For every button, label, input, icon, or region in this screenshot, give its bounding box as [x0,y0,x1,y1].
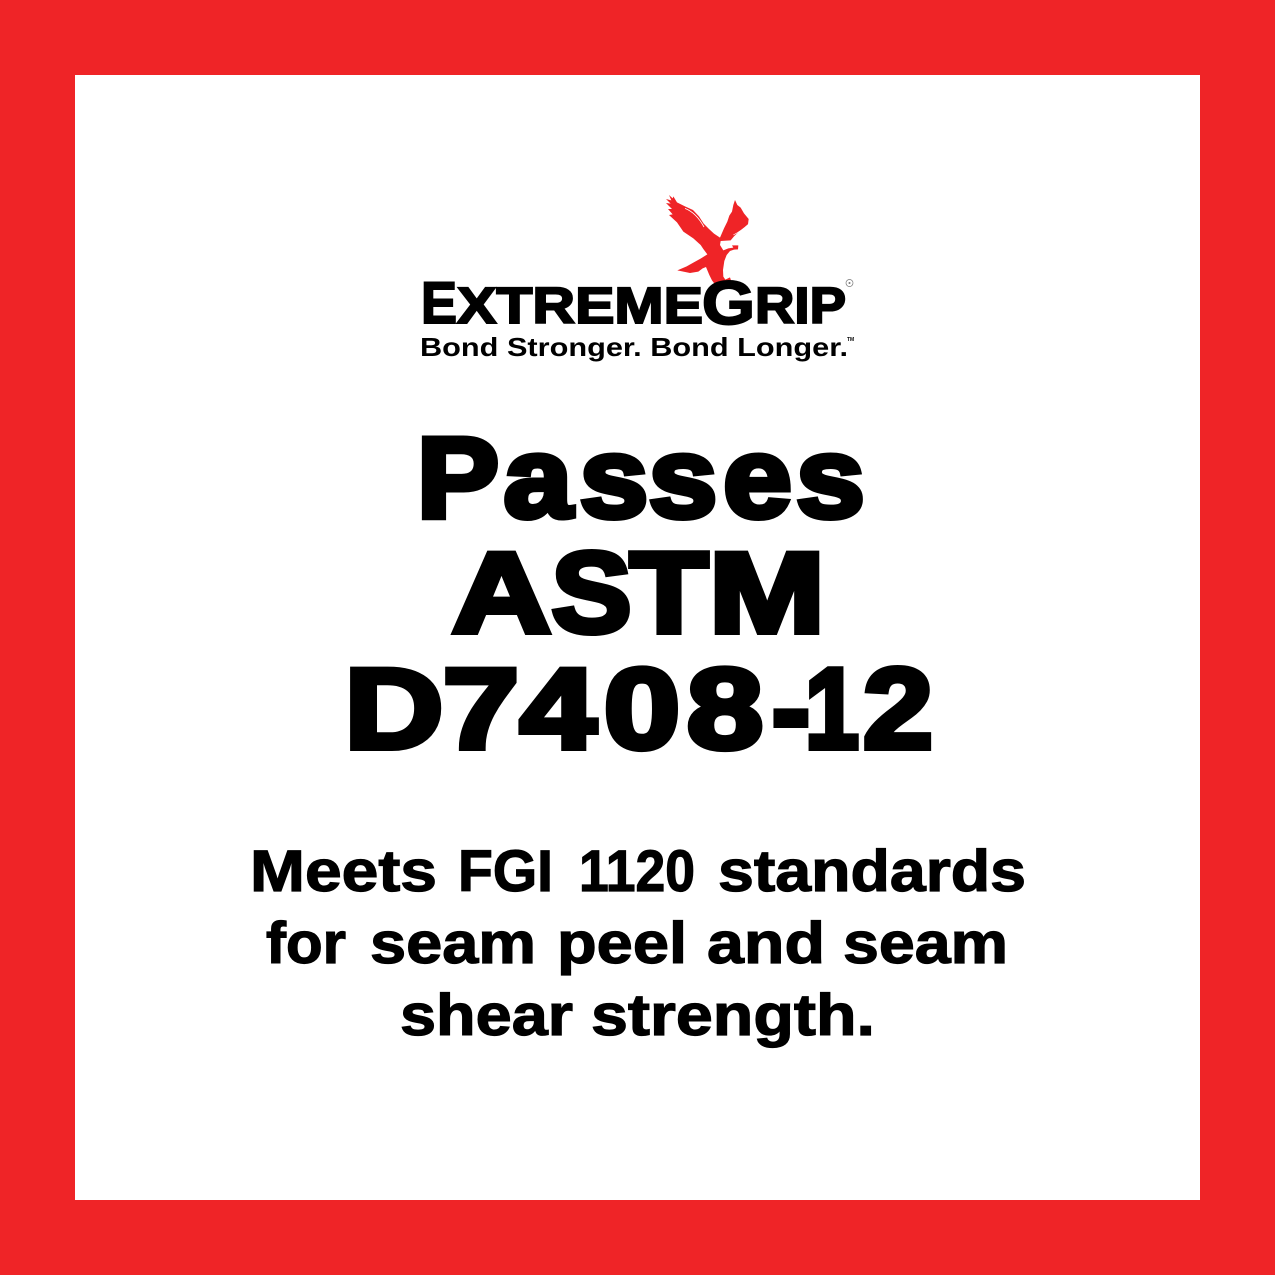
heading line 2: M [709,529,825,656]
heading line 3: - [772,646,810,773]
body line 2: peel [557,911,687,976]
body line 1: standards [718,839,1026,904]
heading line 2: S [552,529,631,656]
body text [250,839,1026,1048]
wordmark [421,269,846,337]
body line 3: strength. [591,983,875,1048]
logo: ExtremeGrip [420,195,854,362]
body line 2 [266,911,1008,976]
wordmark: RIP [755,277,846,334]
wordmark: E [421,271,457,336]
heading line 2 [452,528,825,656]
registered mark [846,280,853,286]
heading line 3: 2 [863,646,933,773]
body line 2: seam [843,911,1008,976]
wordmark: G [702,269,755,337]
body line 1: Meets [250,839,437,904]
wordmark: XTREME [457,277,703,334]
body line 3: shear [400,983,573,1048]
heading line 3: 1 [805,646,859,773]
heading line 2: T [630,528,708,656]
body line 1 [250,839,1026,904]
heading line 2: A [452,529,551,656]
trademark mark: TM [847,337,854,343]
body line 2: for [266,911,346,976]
icon: red eagle [666,195,749,284]
heading line 1: Passes [417,415,865,542]
tagline: Bond Stronger. Bond Longer. [420,332,848,362]
body line 1: FGI [458,839,553,904]
body line 2: seam [370,911,536,976]
body line 1: 1120 [579,839,695,904]
heading line 3: D7408 [345,645,763,772]
body line 2: and [707,911,825,976]
heading: Passes ASTM D7408-12 [345,415,933,773]
body line 3 [400,983,875,1048]
